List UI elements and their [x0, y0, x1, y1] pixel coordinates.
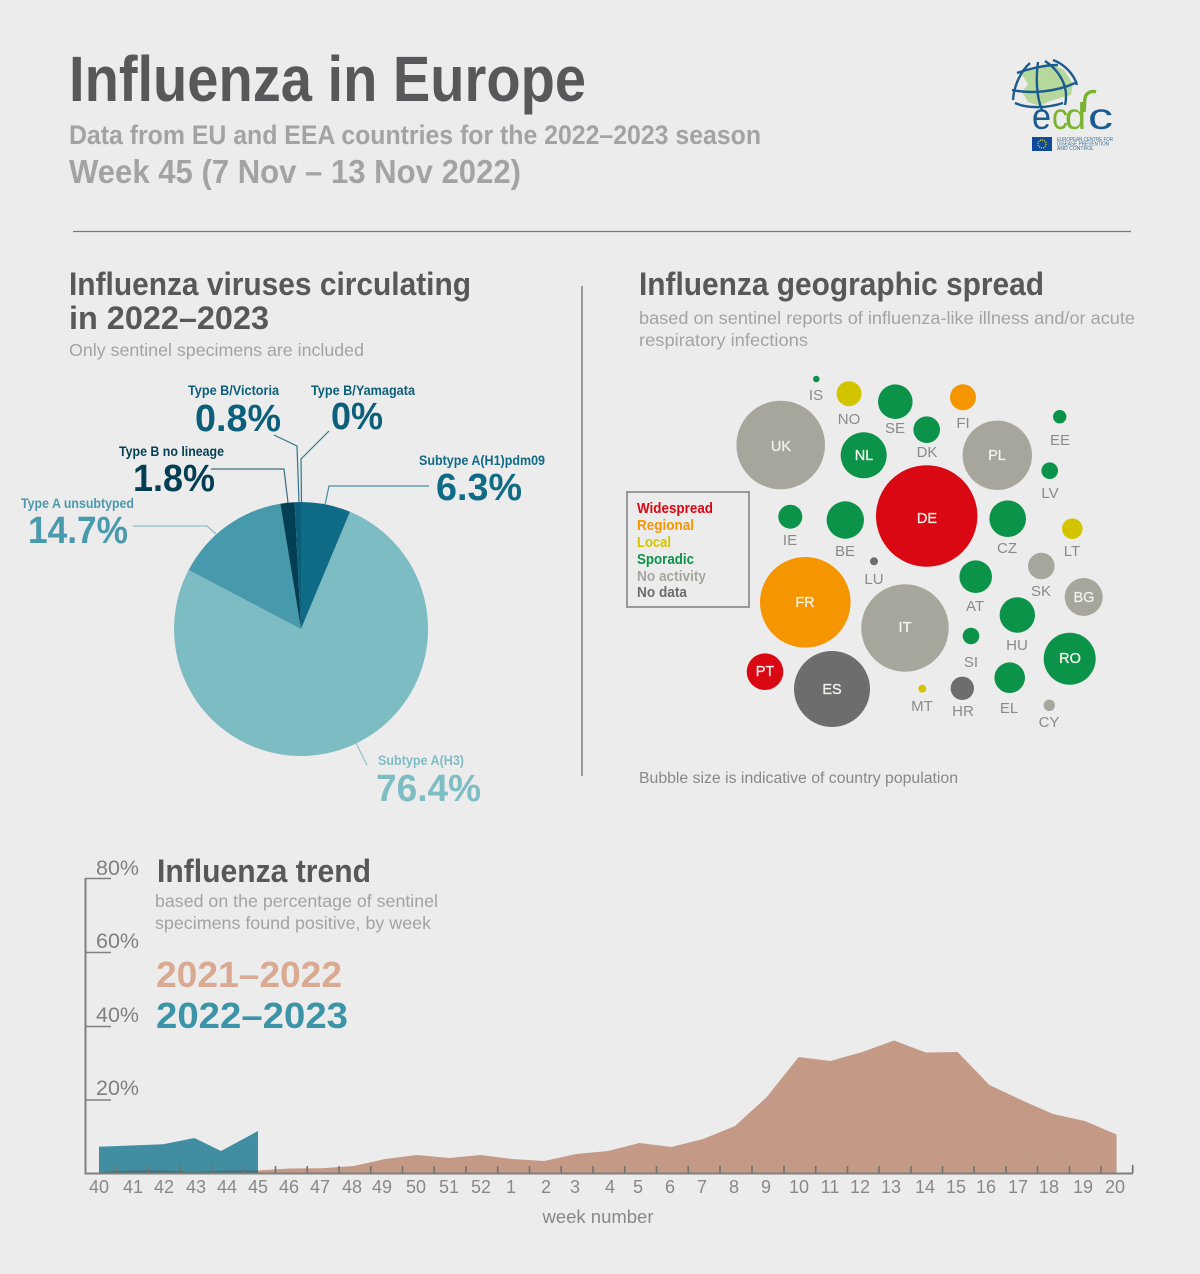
ECDC logo: d — [1065, 96, 1086, 137]
subtitle: week: Week 45 (7 Nov – 13 Nov 2022) — [69, 153, 521, 190]
subheading: geographic spread basis: based on sentinel reports of influenza-like illness and/or acute — [639, 308, 1135, 328]
slice: Type B/Victoria — [295, 502, 301, 629]
x axis week labels: 45 — [248, 1177, 268, 1197]
label: Type B no lineage: Type B no lineage — [119, 444, 224, 459]
legend: 2021-2022 season: 2021–2022 — [156, 954, 342, 995]
legend: spread levels: No data — [637, 585, 688, 601]
label: Type A unsubtyped: Type A unsubtyped — [21, 496, 134, 511]
x axis title: week number — [541, 1207, 654, 1227]
label: Type B/Victoria — [188, 383, 281, 440]
y axis labels: 40% — [96, 1004, 139, 1027]
x axis week labels: 46 — [279, 1177, 299, 1197]
bubble chart: countries: CY — [1039, 714, 1059, 731]
leader lines — [133, 431, 429, 765]
x axis week labels: 49 — [372, 1177, 392, 1197]
chart axes — [85, 878, 1133, 1174]
heading: geographic spread: Influenza geographic spread — [639, 266, 1044, 302]
x axis week labels: 44 — [217, 1177, 237, 1197]
bubble chart: countries: HU — [1006, 637, 1028, 654]
bubble chart: countries: LV — [1041, 485, 1059, 502]
bubble chart: countries: BE — [835, 543, 855, 560]
bubble chart: countries: FR — [795, 595, 815, 611]
x axis week labels: 18 — [1039, 1177, 1059, 1197]
ECDC logo: EUROPEAN CENTRE FOR — [1057, 137, 1113, 143]
x axis week labels: 16 — [976, 1177, 996, 1197]
heading: influenza trend: Influenza trend — [157, 853, 371, 889]
pie chart: virus types — [174, 502, 428, 756]
ECDC logo: c — [1052, 96, 1068, 137]
legend: spread levels: No activity — [637, 569, 706, 585]
bubble chart: countries: FI — [956, 415, 970, 432]
x axis week labels: 12 — [850, 1177, 870, 1197]
slice: Subtype A(H3) — [174, 512, 428, 756]
legend: spread levels — [627, 492, 749, 607]
ECDC logo: e — [1032, 96, 1051, 137]
bubble chart: countries: NL — [855, 448, 873, 464]
area chart: 2021-2022 season — [99, 1040, 1117, 1173]
ECDC logo: DISEASE PREVENTION — [1057, 142, 1109, 148]
subheading: trend basis: based on the percentage of sentinel — [155, 891, 438, 911]
label: Subtype A(H3): 76.4% — [376, 768, 481, 810]
bubble chart: countries: EE — [1050, 432, 1070, 449]
label: Subtype A(H1)pdm09: 6.3% — [436, 467, 522, 509]
bubble chart: countries: RO — [1059, 651, 1081, 667]
ECDC logo: c — [1088, 96, 1113, 137]
x axis week labels: 7 — [697, 1177, 707, 1197]
x axis week labels: 6 — [665, 1177, 675, 1197]
legend: spread levels: Regional — [637, 518, 694, 534]
y axis labels — [96, 857, 139, 1100]
bubble chart: countries: AT — [966, 598, 984, 615]
bubble chart: countries: SK — [1031, 583, 1051, 600]
legend: spread levels: Local — [637, 535, 671, 551]
x axis week labels: 8 — [729, 1177, 739, 1197]
y axis labels: 80% — [96, 857, 139, 880]
bubble chart: countries: ES — [822, 682, 842, 698]
subheading: geographic spread basis: respiratory infections — [639, 330, 808, 350]
x axis week labels: 20 — [1105, 1177, 1125, 1197]
slice: Type A unsubtyped — [189, 504, 301, 629]
label: Type A unsubtyped — [21, 496, 134, 552]
x axis week labels: 48 — [342, 1177, 362, 1197]
bubble chart: countries: DK — [917, 444, 937, 461]
x axis week labels: 50 — [406, 1177, 426, 1197]
x axis week labels: 42 — [154, 1177, 174, 1197]
note: bubble size: Bubble size is indicative of country population — [639, 770, 958, 787]
label: Subtype A(H1)pdm09 — [419, 453, 545, 509]
label: Type B/Yamagata: 0% — [331, 396, 383, 438]
label: Subtype A(H3): Subtype A(H3) — [378, 753, 464, 768]
x axis week labels: 10 — [789, 1177, 809, 1197]
x axis week labels: 2 — [541, 1177, 551, 1197]
x axis week labels: 47 — [310, 1177, 330, 1197]
bubble chart: countries — [736, 376, 1103, 731]
bubble chart: countries: PT — [756, 664, 774, 680]
y axis labels: 60% — [96, 930, 139, 953]
label: Type B no lineage: 1.8% — [133, 458, 215, 500]
label: Type B/Victoria: 0.8% — [195, 398, 281, 440]
x axis week labels: 19 — [1073, 1177, 1093, 1197]
heading: influenza viruses circulating: in 2022–2023 — [69, 300, 269, 336]
x axis week labels: 5 — [633, 1177, 643, 1197]
bubble chart: countries: IS — [809, 387, 823, 404]
legend: 2022-2023 season: 2022–2023 — [156, 995, 348, 1036]
label: Type B no lineage — [119, 444, 224, 500]
x axis week labels: 51 — [439, 1177, 459, 1197]
ECDC logo — [1012, 60, 1113, 152]
bubble chart: countries: UK — [771, 439, 791, 455]
x axis week labels: 14 — [915, 1177, 935, 1197]
x axis week labels: 17 — [1008, 1177, 1028, 1197]
subheading: trend basis: specimens found positive, by week — [155, 913, 431, 933]
bubble chart: countries: IT — [899, 620, 912, 636]
bubble chart: countries: HR — [952, 703, 974, 720]
label: Type B/Victoria: Type B/Victoria — [188, 383, 279, 398]
bubble chart: countries: CZ — [997, 540, 1017, 557]
x axis week labels: 9 — [761, 1177, 771, 1197]
slice: Type B no lineage — [280, 502, 301, 629]
bubble chart: countries: DE — [917, 511, 937, 527]
x axis week labels — [89, 1177, 1125, 1197]
ECDC logo: AND CONTROL — [1057, 146, 1094, 152]
legend: spread levels: Sporadic — [637, 552, 694, 568]
y axis labels: 20% — [96, 1077, 139, 1100]
label: Type A unsubtyped: 14.7% — [28, 510, 128, 552]
x axis week labels: 40 — [89, 1177, 109, 1197]
x axis week labels: 52 — [471, 1177, 491, 1197]
label: Type B/Yamagata — [311, 383, 415, 438]
bubble chart: countries: LU — [864, 571, 884, 588]
bubble chart: countries: BG — [1074, 590, 1094, 606]
bubble chart: countries: MT — [911, 698, 933, 715]
label: Subtype A(H1)pdm09: Subtype A(H1)pdm09 — [419, 453, 545, 468]
bubble chart: countries: NO — [838, 411, 860, 428]
bubble chart: countries: EL — [1000, 700, 1018, 717]
x axis week labels: 15 — [946, 1177, 966, 1197]
x axis week labels: 43 — [186, 1177, 206, 1197]
x axis week labels: 11 — [821, 1177, 839, 1197]
x axis week labels: 4 — [605, 1177, 615, 1197]
subtitle: data scope: Data from EU and EEA countries for the 2022–2023 season — [69, 120, 761, 150]
legend: spread levels: Widespread — [637, 501, 713, 517]
note: sentinel specimens: Only sentinel specimens are included — [69, 340, 364, 360]
bubble chart: countries: LT — [1064, 543, 1080, 560]
heading: influenza viruses circulating: Influenza viruses circulating — [69, 266, 471, 302]
bubble chart: countries: SI — [964, 654, 978, 671]
x axis week labels: 41 — [123, 1177, 143, 1197]
slice: Subtype A(H1)pdm09 — [301, 502, 350, 629]
x axis week labels: 13 — [881, 1177, 901, 1197]
area chart: 2022-2023 season — [99, 1131, 258, 1173]
label: Type B/Yamagata: Type B/Yamagata — [311, 383, 415, 398]
bubble chart: countries: PL — [988, 448, 1006, 464]
x axis week labels: 1 — [506, 1177, 516, 1197]
x axis week labels: 3 — [570, 1177, 580, 1197]
bubble chart: countries: IE — [783, 532, 797, 549]
title: Influenza in Europe — [69, 43, 586, 115]
bubble chart: countries: SE — [885, 420, 905, 437]
